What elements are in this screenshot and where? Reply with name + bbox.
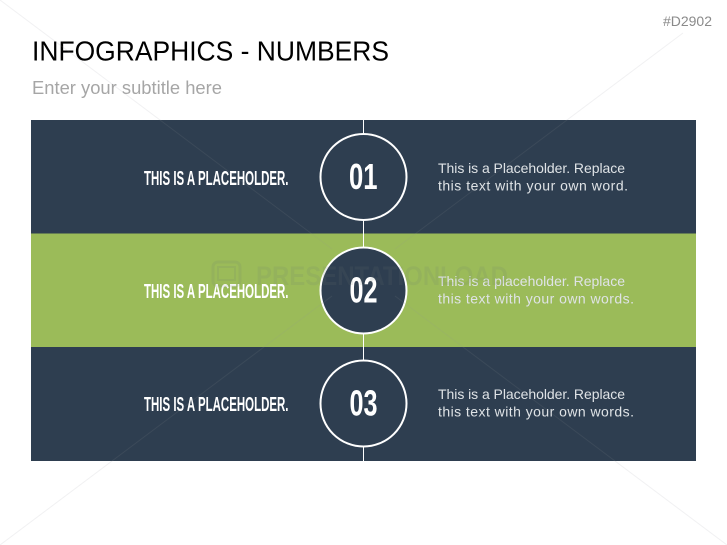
number badge 02: 02 (350, 270, 378, 310)
row 3 heading: THIS IS A PLACEHOLDER. (144, 394, 288, 416)
number badge 02 (320, 248, 406, 334)
number badge 01: 01 (349, 156, 378, 197)
row 3 description: this text with your own words. (438, 404, 634, 420)
vertical connector (362, 120, 364, 461)
panel: row 1 (31, 120, 696, 234)
row 2 description: this text with your own words. (438, 290, 634, 306)
panel: row 2 (31, 234, 696, 347)
document code: #D2902 (663, 14, 712, 29)
row 2 description (438, 273, 634, 306)
row 2 heading: THIS IS A PLACEHOLDER. (144, 281, 288, 303)
row 3 description: This is a Placeholder. Replace (438, 386, 625, 402)
row 1 description: this text with your own word. (438, 178, 628, 194)
watermark logo icon (213, 262, 240, 286)
row 1 description (438, 160, 628, 194)
number badge 03: 03 (350, 382, 378, 424)
panel: row 3 (31, 347, 696, 461)
row 2 description: This is a placeholder. Replace (438, 273, 625, 289)
number badge 03 (320, 360, 406, 446)
number badge 01 (320, 134, 406, 220)
row 1 description: This is a Placeholder. Replace (438, 160, 625, 176)
title: INFOGRAPHICS - NUMBERS (32, 36, 389, 66)
subtitle: Enter your subtitle here (32, 77, 222, 98)
row 1 heading: THIS IS A PLACEHOLDER. (144, 168, 288, 190)
watermark text: PRESENTATIONLOAD (256, 261, 508, 291)
row 3 description (438, 386, 634, 420)
